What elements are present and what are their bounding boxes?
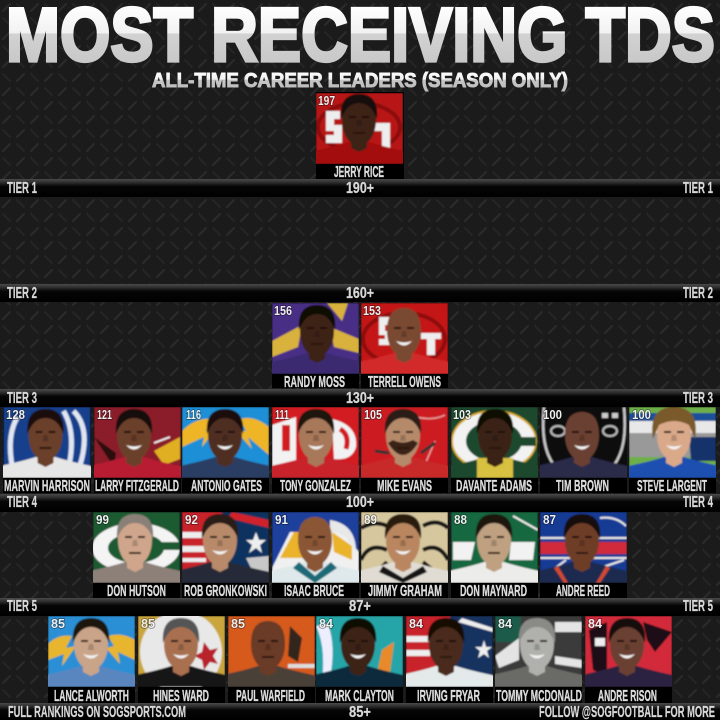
card: Steve Largent	[614, 407, 720, 495]
name: Mark Clayton: MARK CLAYTON	[325, 688, 394, 705]
tier 4 divider	[0, 494, 720, 512]
name: Mike Evans: MIKE EVANS	[377, 478, 432, 495]
value: 88: 88	[454, 513, 467, 527]
tier 2 divider	[0, 284, 720, 302]
value: 89: 89	[364, 513, 377, 527]
footer bar	[0, 703, 720, 720]
value: 121: 121	[97, 408, 112, 422]
portrait: Jerry Rice	[316, 93, 403, 164]
name: Andre Rison: ANDRE RISON	[598, 688, 657, 705]
card: Mark Clayton	[298, 616, 418, 705]
card: Randy Moss	[257, 303, 377, 391]
value: 84 (Mark Clayton): 84	[319, 617, 333, 631]
portrait: Tim Brown	[540, 407, 627, 478]
value: 85 (Paul Warfield): 85	[231, 617, 245, 631]
value: 84 (Tommy McDonald): 84	[498, 617, 512, 631]
card: Davante Adams	[435, 407, 555, 495]
card: Isaac Bruce	[255, 512, 375, 600]
name: Davante Adams: DAVANTE ADAMS	[456, 478, 532, 495]
portrait: Andre Reed	[540, 512, 627, 583]
tier 3 divider	[0, 389, 720, 407]
portrait: Hines Ward	[138, 616, 225, 687]
portrait: Don Maynard	[451, 512, 538, 583]
name: Jimmy Graham: JIMMY GRAHAM	[368, 583, 442, 600]
tier 5 divider	[0, 598, 720, 616]
name: Don Hutson: DON HUTSON	[107, 583, 166, 600]
name: Tony Gonzalez: TONY GONZALEZ	[280, 478, 351, 495]
value: 92: 92	[185, 513, 198, 527]
portrait: Davante Adams	[451, 407, 538, 478]
card: Rob Gronkowski	[160, 512, 280, 600]
portrait: Lance Alworth	[48, 616, 135, 687]
tier 4 divider: 100+	[346, 494, 374, 511]
portrait: Irving Fryar	[406, 616, 493, 687]
portrait: Marvin Harrison	[3, 407, 91, 478]
name: Hines Ward: HINES WARD	[153, 688, 209, 705]
card: Marvin Harrison	[0, 407, 106, 495]
value: 111: 111	[275, 408, 289, 422]
value: 87: 87	[543, 513, 556, 527]
portrait: Larry Fitzgerald	[94, 407, 181, 478]
card: Don Maynard	[434, 512, 554, 600]
value: 91: 91	[275, 513, 288, 527]
name: Antonio Gates: ANTONIO GATES	[191, 478, 262, 495]
value: 156: 156	[274, 304, 292, 318]
card: Terrell Owens	[344, 303, 464, 391]
tier 4 divider: TIER 4	[7, 494, 37, 511]
name: Paul Warfield: PAUL WARFIELD	[236, 688, 305, 705]
portrait: Tony Gonzalez	[272, 407, 359, 478]
card: Antonio Gates	[165, 407, 285, 495]
name: Don Maynard: DON MAYNARD	[460, 583, 527, 600]
card: Jimmy Graham	[343, 512, 463, 600]
value: 128: 128	[6, 408, 25, 422]
card: Hines Ward	[121, 611, 241, 705]
value: 100 (Steve Largent): 100	[632, 408, 651, 422]
value: 153: 153	[363, 304, 381, 318]
name: Larry Fitzgerald: LARRY FITZGERALD	[95, 478, 179, 495]
tier 5 divider: TIER 5	[7, 598, 37, 615]
portrait: Antonio Gates	[182, 407, 269, 478]
portrait: Paul Warfield	[228, 616, 315, 687]
portrait: Jimmy Graham	[361, 512, 448, 583]
portrait: Steve Largent	[629, 407, 716, 478]
name: Irving Fryar: IRVING FRYAR	[417, 688, 480, 705]
tier 1 divider: 190+	[346, 180, 374, 197]
card: Don Hutson	[75, 512, 195, 600]
value: 84 (Andre Rison): 84	[588, 617, 602, 631]
portrait: Mike Evans	[361, 407, 448, 478]
name: Isaac Bruce: ISAAC BRUCE	[284, 583, 344, 600]
name: Rob Gronkowski: ROB GRONKOWSKI	[184, 583, 267, 600]
portrait: Randy Moss	[272, 303, 359, 374]
portrait: Isaac Bruce	[272, 512, 359, 583]
tier 1 divider: TIER 1	[7, 180, 37, 197]
card: Irving Fryar	[386, 616, 506, 705]
card: Andre Rison	[567, 616, 687, 705]
value: 105: 105	[364, 408, 382, 422]
tier 3 divider: 130+	[346, 390, 374, 407]
tier 5 divider: 87+	[349, 598, 371, 615]
value: 85 (Hines Ward): 85	[141, 617, 155, 631]
card: Lance Alworth	[31, 616, 151, 705]
card: Andre Reed	[522, 512, 642, 600]
name: Andre Reed: ANDRE REED	[556, 583, 610, 600]
portrait: Tommy McDonald	[495, 616, 582, 687]
tier 3 divider: TIER 3	[7, 390, 37, 407]
portrait: Terrell Owens	[361, 303, 448, 374]
subtitle: ALL-TIME CAREER LEADERS (SEASON ONLY)	[152, 69, 568, 92]
name: Marvin Harrison: MARVIN HARRISON	[4, 478, 90, 495]
value: 100 (Tim Brown): 100	[543, 408, 562, 422]
value: 116: 116	[186, 408, 201, 422]
card: Jerry Rice	[299, 92, 419, 181]
value: 197: 197	[318, 94, 335, 108]
value: 103: 103	[453, 408, 471, 422]
name: Lance Alworth: LANCE ALWORTH	[54, 688, 129, 705]
name: Tim Brown: TIM BROWN	[556, 478, 609, 495]
card: Tim Brown	[522, 407, 642, 495]
card: Mike Evans	[343, 407, 463, 495]
tier 2 divider: TIER 2	[7, 285, 37, 302]
tier 2 divider: 160+	[346, 285, 374, 302]
card: Paul Warfield	[208, 616, 328, 705]
card: Larry Fitzgerald	[74, 407, 194, 495]
value: 99: 99	[96, 513, 109, 527]
portrait: Mark Clayton	[316, 616, 403, 687]
card: Tommy McDonald	[477, 616, 597, 705]
portrait: Andre Rison	[585, 616, 672, 687]
name: Tommy McDonald: TOMMY MCDONALD	[496, 688, 582, 705]
name: Jerry Rice: JERRY RICE	[334, 164, 384, 181]
value: 84 (Irving Fryar): 84	[409, 617, 423, 631]
value: 85 (Lance Alworth): 85	[51, 617, 65, 631]
name: Randy Moss: RANDY MOSS	[284, 374, 345, 391]
portrait: Don Hutson	[93, 512, 180, 583]
name: Terrell Owens: TERRELL OWENS	[368, 374, 441, 391]
tier 1 divider	[0, 179, 720, 197]
portrait: Rob Gronkowski	[182, 512, 269, 583]
card: Tony Gonzalez	[256, 407, 376, 495]
